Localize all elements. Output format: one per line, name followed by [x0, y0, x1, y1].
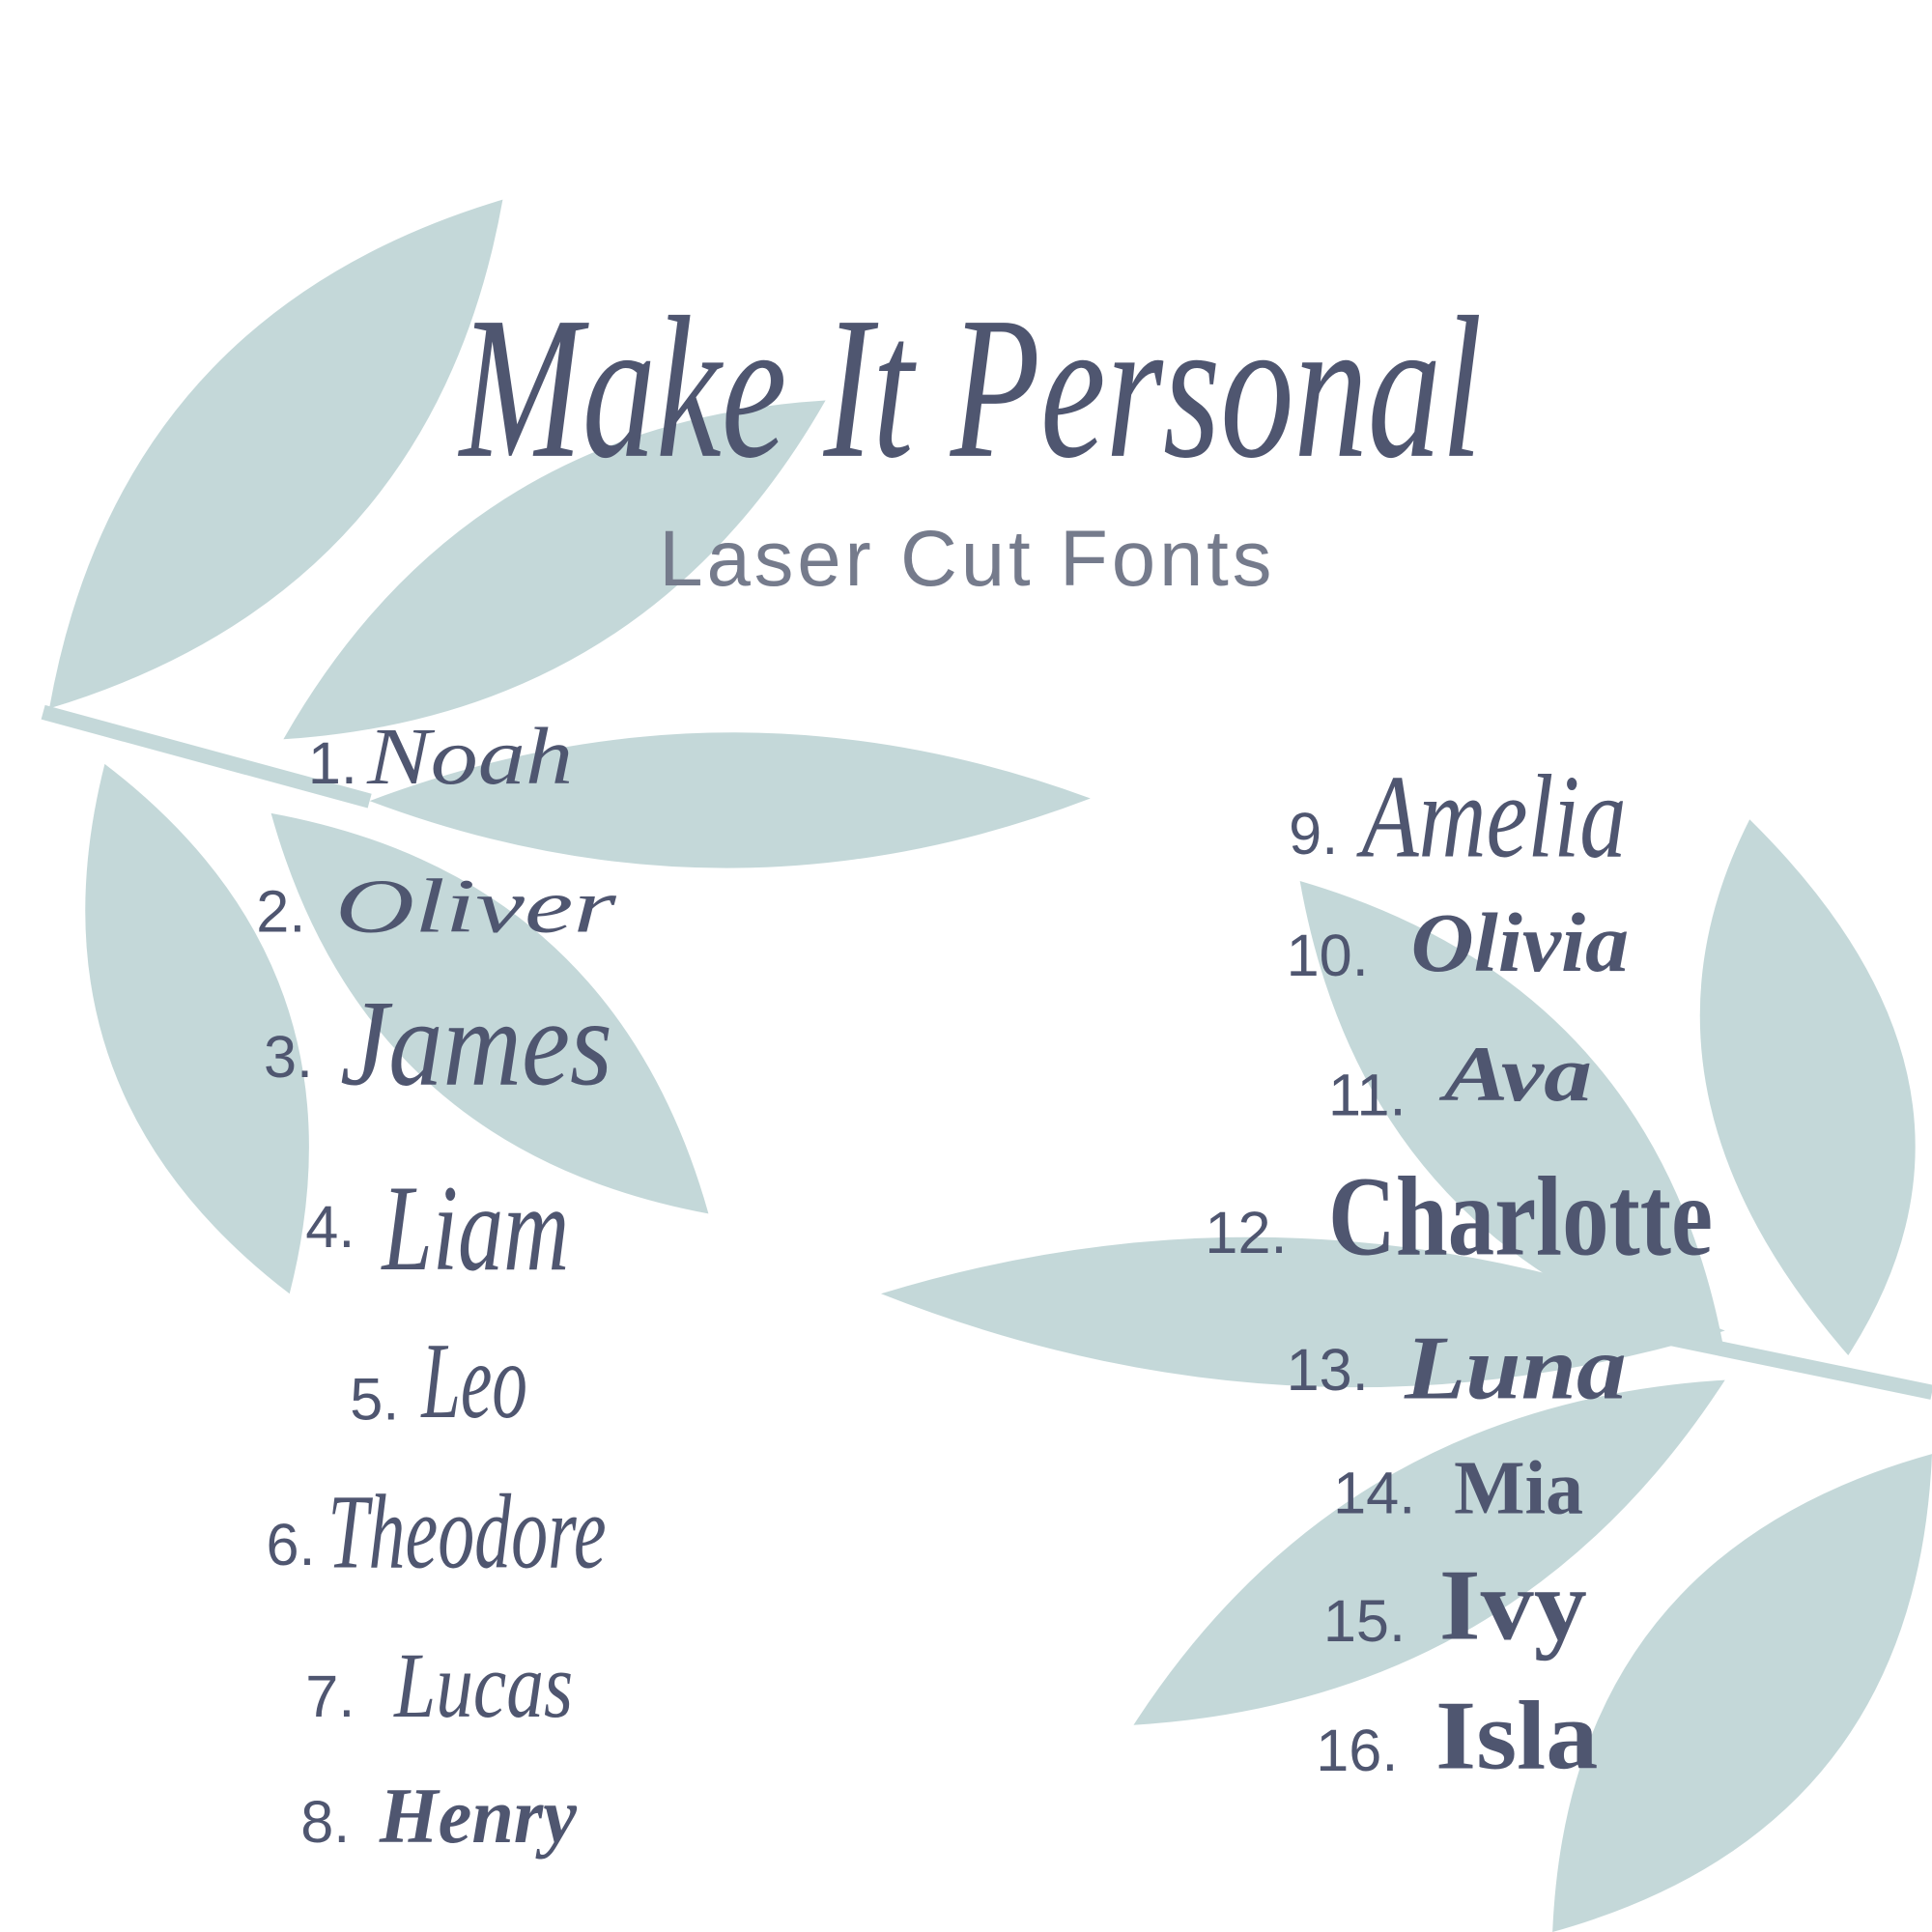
left list: Theodore	[327, 1472, 607, 1590]
right list: Luna	[1404, 1319, 1627, 1419]
subtitle: Laser Cut Fonts	[659, 515, 1275, 603]
left list: Noah	[366, 712, 573, 802]
left list: James	[340, 974, 612, 1111]
left list: 5.	[350, 1366, 399, 1432]
right list: Amelia	[1356, 752, 1627, 882]
right list: Ivy	[1439, 1548, 1587, 1661]
right list: Charlotte	[1328, 1153, 1713, 1279]
right list: Isla	[1435, 1681, 1598, 1790]
leaves: left branch	[43, 200, 1091, 1293]
left list: 3.	[264, 1024, 313, 1090]
right list: 11.	[1328, 1062, 1406, 1127]
left list: 4.	[305, 1194, 355, 1260]
right list: 10.	[1287, 923, 1369, 988]
left list: Henry	[379, 1772, 578, 1860]
left list: Leo	[420, 1321, 527, 1441]
title: Make It Personal	[458, 274, 1482, 500]
leaves: right branch	[881, 819, 1932, 1932]
left list: 2.	[256, 878, 305, 944]
left list: Liam	[381, 1159, 569, 1296]
right list: Mia	[1454, 1446, 1583, 1530]
right list: 9.	[1289, 801, 1338, 867]
left list: 7.	[305, 1663, 355, 1729]
right list: Olivia	[1410, 896, 1629, 989]
right list: 12.	[1205, 1200, 1288, 1265]
left list: Lucas	[393, 1634, 573, 1737]
left list: 1.	[308, 730, 357, 796]
right list: Ava	[1438, 1030, 1592, 1118]
right list: 14.	[1333, 1460, 1415, 1525]
left list	[256, 712, 616, 1860]
left list: Oliver	[335, 865, 616, 949]
right list: 15.	[1323, 1588, 1406, 1654]
left list: 6.	[267, 1512, 316, 1577]
left list: 8.	[300, 1789, 350, 1855]
right list: 16.	[1316, 1718, 1398, 1783]
right list: 13.	[1287, 1337, 1369, 1403]
right list	[1205, 752, 1713, 1790]
